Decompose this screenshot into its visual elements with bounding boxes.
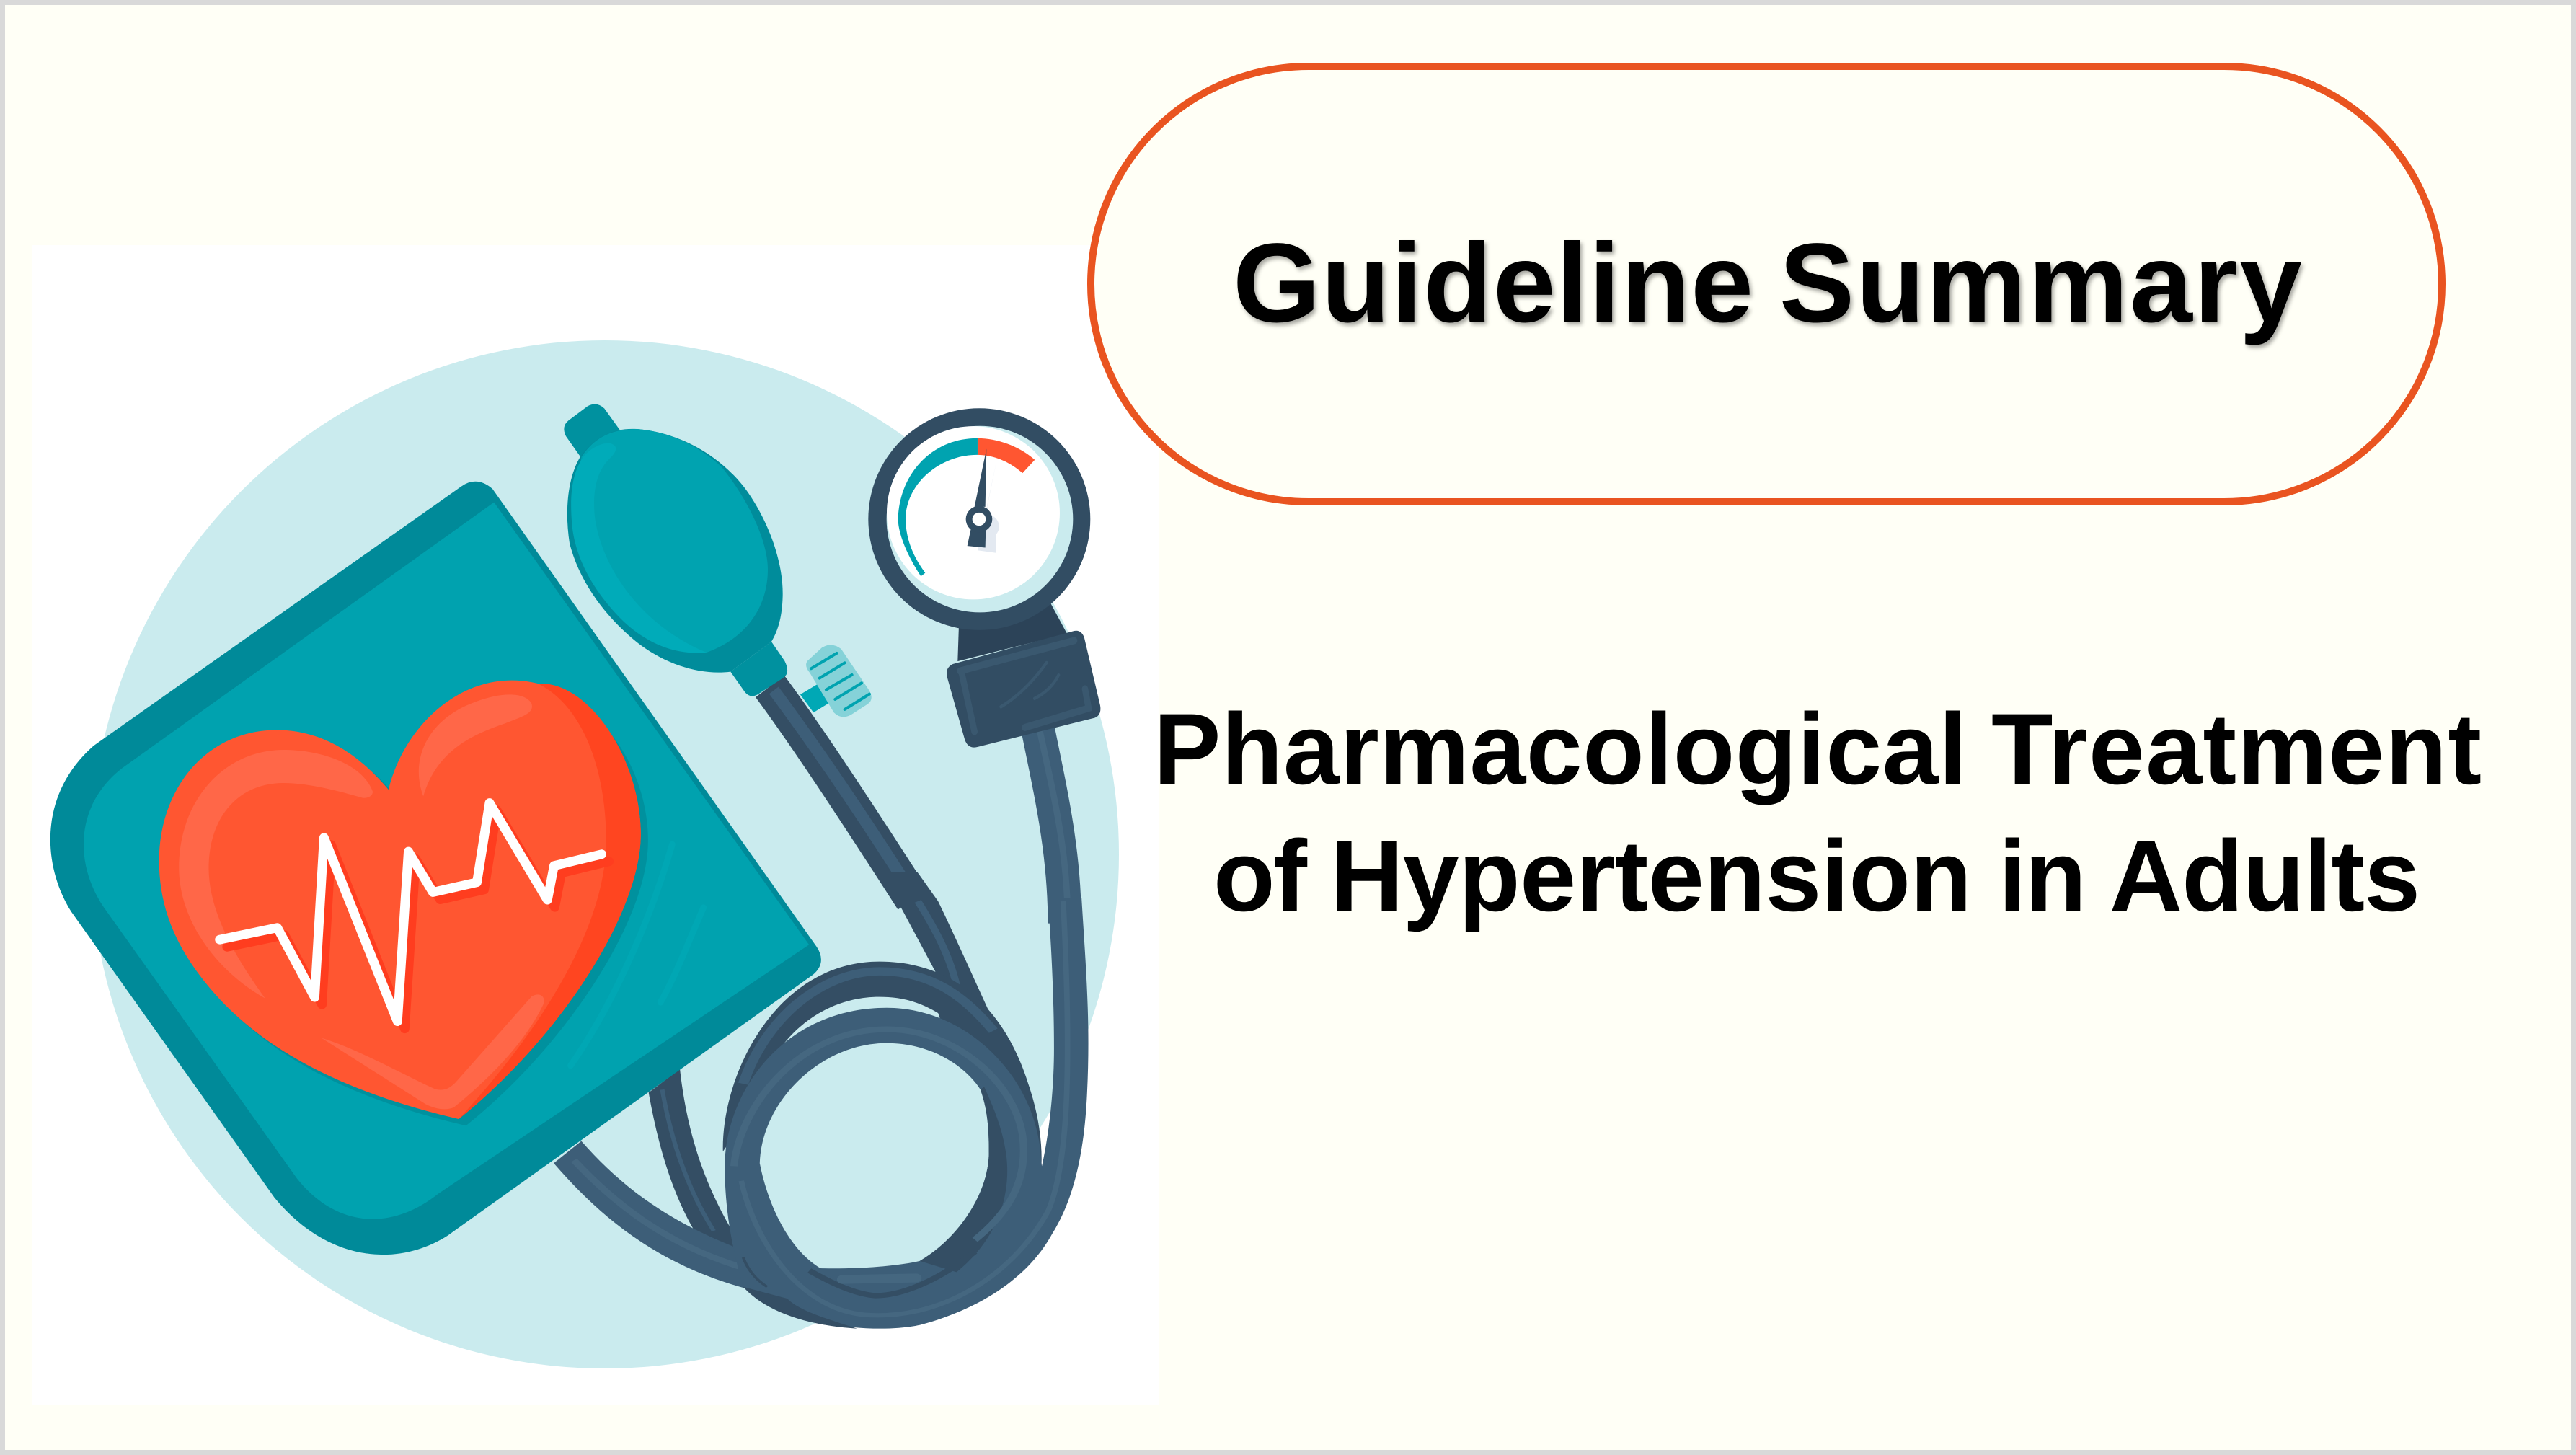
valve knob bbox=[806, 645, 872, 717]
gauge ring bbox=[868, 408, 1090, 630]
heading: guideline summary: Summary bbox=[1779, 221, 2302, 346]
heading: guideline summary: Guideline bbox=[1233, 221, 1753, 346]
hose: coil mass with gauge hose bbox=[725, 898, 1089, 1329]
hose: lower tubes bbox=[649, 1069, 745, 1252]
heart shadow bbox=[167, 687, 648, 1125]
hose coil bbox=[554, 872, 1089, 1329]
bracket bbox=[957, 603, 1067, 661]
heart highlights bbox=[179, 694, 544, 1109]
pulse line bbox=[220, 803, 602, 1022]
clamp bbox=[947, 631, 1100, 748]
illustration: blood pressure monitor bbox=[32, 245, 1159, 1405]
heading: guideline summary bbox=[1233, 221, 2302, 346]
hose: outer loop bbox=[723, 962, 1042, 1172]
subtitle text: Hypertension bbox=[1330, 819, 1972, 932]
hose: highlights bbox=[734, 901, 1068, 1315]
gauge bbox=[868, 408, 1100, 748]
heart dark crescent bbox=[459, 684, 641, 1119]
inflation bulb with valve bbox=[564, 404, 872, 717]
subtitle text: of bbox=[1213, 819, 1307, 932]
subtitle text: Pharmacological bbox=[1154, 692, 1967, 805]
red arc bbox=[978, 438, 1035, 473]
bulb body bbox=[567, 429, 783, 673]
panel: title pill bbox=[1091, 66, 2442, 502]
pulse line shadow bbox=[227, 810, 609, 1029]
heart body bbox=[159, 681, 641, 1119]
hose: coil opening bbox=[760, 1043, 989, 1268]
teal arc bbox=[898, 438, 978, 576]
background circle bbox=[91, 340, 1119, 1368]
needle shadow bbox=[978, 460, 999, 553]
hoses: upper runs bbox=[770, 686, 1068, 924]
subtitle text bbox=[1154, 692, 2482, 932]
gauge face bbox=[887, 426, 1073, 612]
valve stem bbox=[800, 684, 829, 712]
needle bbox=[966, 448, 992, 547]
hose: lower run into coil bbox=[877, 872, 1028, 1089]
subtitle text: Treatment bbox=[1991, 692, 2482, 805]
hose: inner shadow bbox=[920, 1087, 1007, 1272]
bulb neck bbox=[730, 642, 787, 696]
subtitle text: in bbox=[1999, 819, 2086, 932]
heart with pulse line bbox=[159, 681, 648, 1125]
cuff bbox=[50, 482, 821, 1255]
bulb top cap bbox=[564, 404, 620, 456]
subtitle text: Adults bbox=[2110, 819, 2420, 932]
